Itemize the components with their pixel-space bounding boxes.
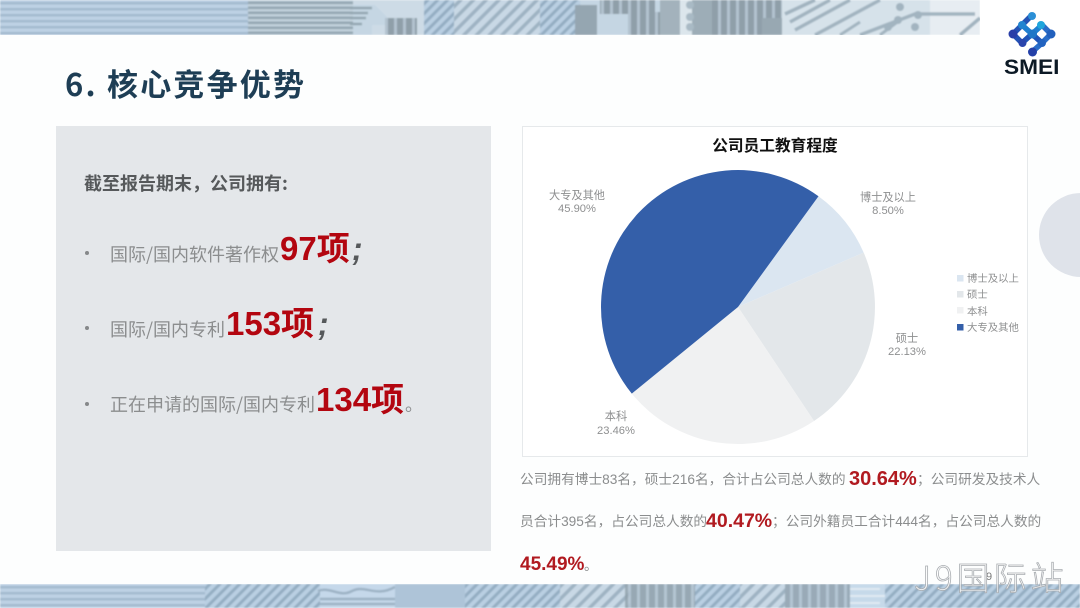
slice: 硕士 (738, 253, 875, 421)
line 1: ；公司研发及技术人 (917, 472, 1040, 487)
chart legend: 大专及其他 (967, 321, 1019, 334)
line 1: 30.64% (849, 468, 917, 490)
line 2: ；公司外籍员工合计444名，占公司总人数的 (772, 514, 1041, 529)
data labels: 8.50% (872, 205, 904, 217)
watermark: J9国际站 (914, 552, 1068, 600)
line 3: 45.49% (520, 554, 584, 575)
data labels: 博士及以上 (860, 191, 916, 204)
chart legend: 硕士 (967, 288, 988, 301)
icon: molecule diamond (1008, 12, 1056, 56)
bottom circuit banner (0, 584, 1080, 608)
data labels: 硕士 (896, 332, 918, 345)
line 1 (520, 468, 1040, 490)
line 2: 40.47% (706, 510, 772, 532)
line 2 (520, 510, 1041, 532)
data labels: 本科 (605, 409, 627, 423)
staff text block (520, 468, 1041, 575)
data labels: 22.13% (888, 346, 926, 358)
slice: 大专及其他 (601, 170, 818, 394)
bullet: patents: ; (318, 306, 329, 342)
data labels (549, 188, 926, 437)
bullet: patents (85, 305, 329, 342)
slice: 博士及以上 (738, 196, 864, 307)
logo: SMEI (980, 0, 1080, 80)
chart legend (957, 272, 1019, 334)
bullet: patents: 153项 (226, 305, 314, 342)
page number: 9 (986, 571, 992, 583)
panel: education pie chart (522, 126, 1028, 457)
chart legend: 本科 (967, 305, 988, 318)
panel heading: 截至报告期末，公司拥有: (84, 170, 288, 196)
line 3: 。 (584, 558, 598, 573)
data labels: 45.90% (558, 203, 596, 215)
decorative side circle (1039, 193, 1080, 277)
panel: patents and copyrights (56, 126, 491, 551)
bullet: software copyrights: 国际/国内软件著作权 (110, 241, 279, 267)
data labels: 大专及其他 (549, 188, 605, 202)
top circuit banner (0, 0, 980, 35)
bullet: pending patents: 134项 (316, 381, 404, 418)
bullet: pending patents: 。 (405, 395, 423, 415)
bullet: software copyrights: ; (352, 231, 363, 267)
bullet: patents: 国际/国内专利 (110, 316, 225, 342)
bullet: pending patents: 正在申请的国际/国内专利 (110, 391, 315, 417)
data labels: 23.46% (597, 425, 635, 437)
title: 6. 核心竞争优势 (65, 60, 306, 105)
bullet: software copyrights (85, 230, 363, 267)
chart title: 公司员工教育程度 (712, 133, 838, 156)
logo wordmark: SMEI (1004, 56, 1059, 79)
line 1: 公司拥有博士83名，硕士216名，合计占公司总人数的 (520, 472, 846, 487)
slice: 本科 (632, 307, 814, 444)
line 2: 员合计395名，占公司总人数的 (520, 514, 707, 529)
chart legend: 博士及以上 (967, 272, 1019, 285)
pie chart (549, 170, 926, 444)
bullet: pending patents (85, 381, 423, 418)
bullet: software copyrights: 97项 (280, 230, 350, 267)
